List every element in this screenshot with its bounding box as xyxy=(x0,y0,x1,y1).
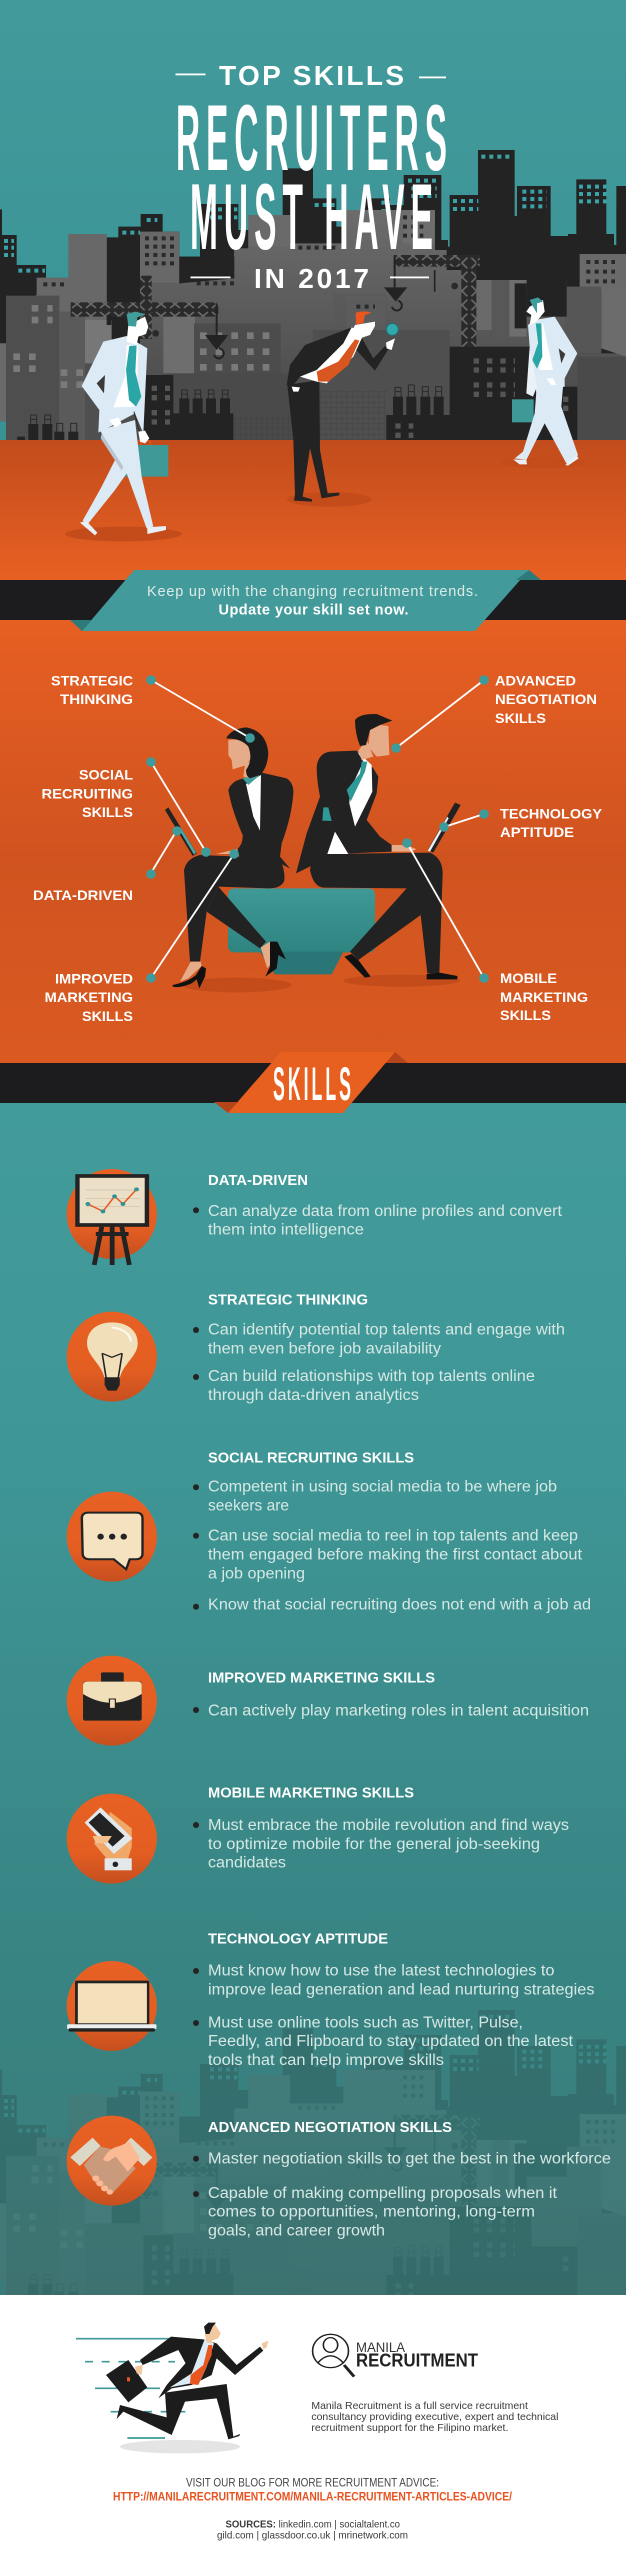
icon: hand holding phone xyxy=(67,1794,157,1884)
heading: strategic thinking: STRATEGIC THINKING xyxy=(208,1293,368,1309)
label: social recruiting skills: RECRUITING xyxy=(42,786,133,802)
blog call to action: HTTP://MANILARECRUITMENT.COM/MANILA-RECRUITMENT-ARTICLES-ADVICE/ xyxy=(113,2492,513,2504)
bullets: technology aptitude: improve lead generation and lead nurturing strategies xyxy=(208,1981,595,1998)
orange section background xyxy=(0,600,626,1070)
label: strategic thinking: THINKING xyxy=(60,691,133,707)
label: improved marketing skills: IMPROVED xyxy=(55,970,133,986)
white footer xyxy=(0,2295,626,2560)
black band, top xyxy=(0,580,626,620)
icon: briefcase xyxy=(67,1656,157,1746)
orange ground xyxy=(0,440,626,582)
skills section background xyxy=(0,1100,626,2295)
bullets: technology aptitude xyxy=(193,1963,595,2069)
bullets: social recruiting skills: them engaged before making the first contact about xyxy=(208,1546,583,1563)
bullets: technology aptitude: Feedly, and Flipboard to stay updated on the latest xyxy=(208,2033,574,2050)
black band, skills xyxy=(0,1063,626,1103)
logo: manila recruitment: MANILA xyxy=(356,2339,406,2355)
walking man with briefcase, right xyxy=(501,297,586,468)
bullets: social recruiting skills: Competent in using social media to be where job xyxy=(208,1478,557,1495)
seated woman and man back to back on a bench xyxy=(165,714,461,992)
banner text xyxy=(147,584,478,618)
bullets: technology aptitude: Must use online tools such as Twitter, Pulse, xyxy=(208,2014,523,2031)
bullets: advanced negotiation skills: goals, and career growth xyxy=(208,2223,385,2240)
callouts: left xyxy=(33,672,255,1024)
heading: improved marketing skills: IMPROVED MARKETING SKILLS xyxy=(208,1671,435,1687)
label: technology aptitude: APTITUDE xyxy=(500,824,574,840)
label: technology aptitude: TECHNOLOGY xyxy=(500,806,603,822)
sources: gild.com | glassdoor.co.uk | mrinetwork.com xyxy=(217,2529,408,2541)
bullets: data-driven: Can analyze data from online profiles and convert xyxy=(208,1203,563,1220)
heading: social recruiting skills: SOCIAL RECRUITING SKILLS xyxy=(208,1451,414,1467)
bending man with magnifying glass, centre xyxy=(287,311,398,507)
sky background xyxy=(0,0,626,441)
bullets: mobile marketing skills xyxy=(193,1817,569,1872)
skills heading ribbon xyxy=(214,1052,408,1113)
icon: speech bubble xyxy=(67,1492,157,1582)
sources: SOURCES: linkedin.com | socialtalent.co xyxy=(226,2518,400,2530)
bullets: social recruiting skills xyxy=(193,1478,591,1613)
company description: consultancy providing executive, expert and technical xyxy=(311,2411,558,2423)
icon: presentation chart xyxy=(67,1169,157,1265)
man xyxy=(296,714,461,979)
label: strategic thinking xyxy=(51,672,133,707)
logo: manila recruitment: RECRUITMENT xyxy=(356,2350,478,2370)
walking man with briefcase, left xyxy=(65,312,182,541)
icon: light bulb xyxy=(67,1312,157,1402)
sources xyxy=(217,2518,408,2541)
callouts: right xyxy=(391,672,603,1023)
heading: technology aptitude: TECHNOLOGY APTITUDE xyxy=(208,1931,388,1947)
leader lines and dots: right xyxy=(396,680,484,978)
skill: mobile marketing skills xyxy=(67,1786,569,1884)
icon: laptop xyxy=(67,1961,157,2051)
label: advanced negotiation skills xyxy=(495,672,597,726)
label: advanced negotiation skills: NEGOTIATION xyxy=(495,691,597,707)
label: social recruiting skills xyxy=(42,766,133,820)
running businessman xyxy=(76,2323,268,2453)
bullets: strategic thinking xyxy=(193,1322,565,1404)
label: mobile marketing skills xyxy=(500,970,588,1023)
label: advanced negotiation skills: ADVANCED xyxy=(495,672,576,688)
company description: Manila Recruitment is a full service recruitment xyxy=(311,2400,528,2412)
bullets: improved marketing skills: Can actively play marketing roles in talent acquisition xyxy=(208,1702,589,1719)
banner text: Update your skill set now. xyxy=(218,602,408,618)
bullets: mobile marketing skills: to optimize mobile for the general job-seeking xyxy=(208,1836,540,1853)
company description: recruitment support for the Filipino market. xyxy=(311,2422,508,2434)
bench xyxy=(228,888,375,974)
bullets: data-driven xyxy=(193,1203,563,1239)
heading: mobile marketing skills: MOBILE MARKETING SKILLS xyxy=(208,1786,414,1802)
blog call to action: VISIT OUR BLOG FOR MORE RECRUITMENT ADVICE: xyxy=(186,2478,439,2490)
label: mobile marketing skills: MARKETING xyxy=(500,989,588,1005)
figure shadows xyxy=(182,975,460,992)
label: mobile marketing skills: MOBILE xyxy=(500,970,557,986)
skill: data-driven xyxy=(67,1169,563,1265)
skill: strategic thinking xyxy=(67,1293,565,1404)
teal banner ribbon xyxy=(70,570,541,631)
label: technology aptitude xyxy=(500,806,603,840)
woman xyxy=(165,727,293,988)
bullets: advanced negotiation skills: comes to opportunities, mentoring, long-term xyxy=(208,2204,535,2221)
skill: advanced negotiation skills xyxy=(67,2116,611,2240)
icon: handshake xyxy=(67,2116,157,2206)
heading: advanced negotiation skills: ADVANCED NEGOTIATION SKILLS xyxy=(208,2120,452,2136)
bullets: social recruiting skills: Can use social media to reel in top talents and keep xyxy=(208,1528,578,1545)
company description xyxy=(311,2400,558,2434)
bullets: data-driven: them into intelligence xyxy=(208,1222,364,1239)
label: strategic thinking: STRATEGIC xyxy=(51,672,133,688)
skill: social recruiting skills xyxy=(67,1451,591,1613)
blog call to action xyxy=(113,2478,513,2504)
title line: in 2017: IN 2017 xyxy=(254,263,369,294)
bullets: advanced negotiation skills xyxy=(193,2150,611,2240)
faded skyline watermark xyxy=(0,2010,626,2320)
label: data-driven: DATA-DRIVEN xyxy=(33,887,133,903)
skill: technology aptitude xyxy=(67,1931,595,2069)
bullets: strategic thinking: through data-driven analytics xyxy=(208,1387,419,1404)
city skyline with cranes xyxy=(0,150,626,440)
skills heading ribbon: SKILLS xyxy=(273,1057,354,1110)
bullets: mobile marketing skills: candidates xyxy=(208,1855,286,1872)
bullets: advanced negotiation skills: Capable of making compelling proposals when it xyxy=(208,2185,558,2202)
label: mobile marketing skills: SKILLS xyxy=(500,1007,551,1023)
bullets: strategic thinking: Can identify potential top talents and engage with xyxy=(208,1322,565,1339)
heading: data-driven: DATA-DRIVEN xyxy=(208,1173,308,1189)
bullets: social recruiting skills: a job opening xyxy=(208,1565,305,1582)
bullets: mobile marketing skills: Must embrace the mobile revolution and find ways xyxy=(208,1817,569,1834)
bullets: social recruiting skills: seekers are xyxy=(208,1497,289,1514)
label: improved marketing skills: MARKETING xyxy=(45,989,133,1005)
bullets: technology aptitude: Must know how to use the latest technologies to xyxy=(208,1963,554,1980)
title line: top skills: TOP SKILLS xyxy=(219,60,404,91)
bullets: advanced negotiation skills: Master negotiation skills to get the best in the workforce xyxy=(208,2150,611,2167)
leader lines and dots: left xyxy=(151,680,250,978)
label: advanced negotiation skills: SKILLS xyxy=(495,710,546,726)
skill: improved marketing skills xyxy=(67,1656,589,1746)
label: improved marketing skills: SKILLS xyxy=(82,1008,133,1024)
banner text: Keep up with the changing recruitment trends. xyxy=(147,584,478,600)
label: social recruiting skills: SOCIAL xyxy=(79,766,133,782)
bullets: social recruiting skills: Know that social recruiting does not end with a job ad xyxy=(208,1596,591,1613)
title xyxy=(176,60,453,294)
label: improved marketing skills xyxy=(45,970,133,1024)
bullets: strategic thinking: Can build relationships with top talents online xyxy=(208,1368,535,1385)
bullets: strategic thinking: them even before job availability xyxy=(208,1341,441,1358)
logo: manila recruitment xyxy=(313,2334,478,2377)
label: social recruiting skills: SKILLS xyxy=(82,804,133,820)
bullets: technology aptitude: tools that can help improve skills xyxy=(208,2052,444,2069)
